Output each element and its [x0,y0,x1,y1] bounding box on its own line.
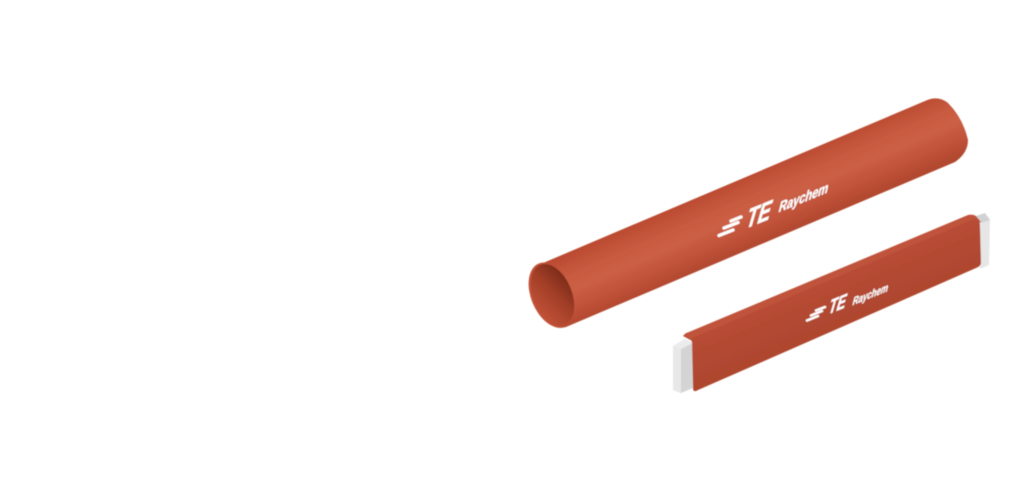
tube opening [520,256,583,334]
right metal end [975,213,990,269]
bar logo [807,282,890,320]
TE mark: TE [826,290,849,320]
logo stripes [719,217,741,236]
left metal end [673,339,693,393]
TE mark: TE [743,193,776,235]
logo stripes [807,307,825,320]
Raychem wordmark: Raychem [777,180,830,217]
flat covered busbar [673,213,990,393]
Raychem wordmark: Raychem [851,282,890,309]
bar front face [690,219,981,391]
round heat-shrink tube [520,98,968,334]
tube body [530,98,968,328]
bar top edge [683,215,981,342]
tube logo [719,180,830,236]
